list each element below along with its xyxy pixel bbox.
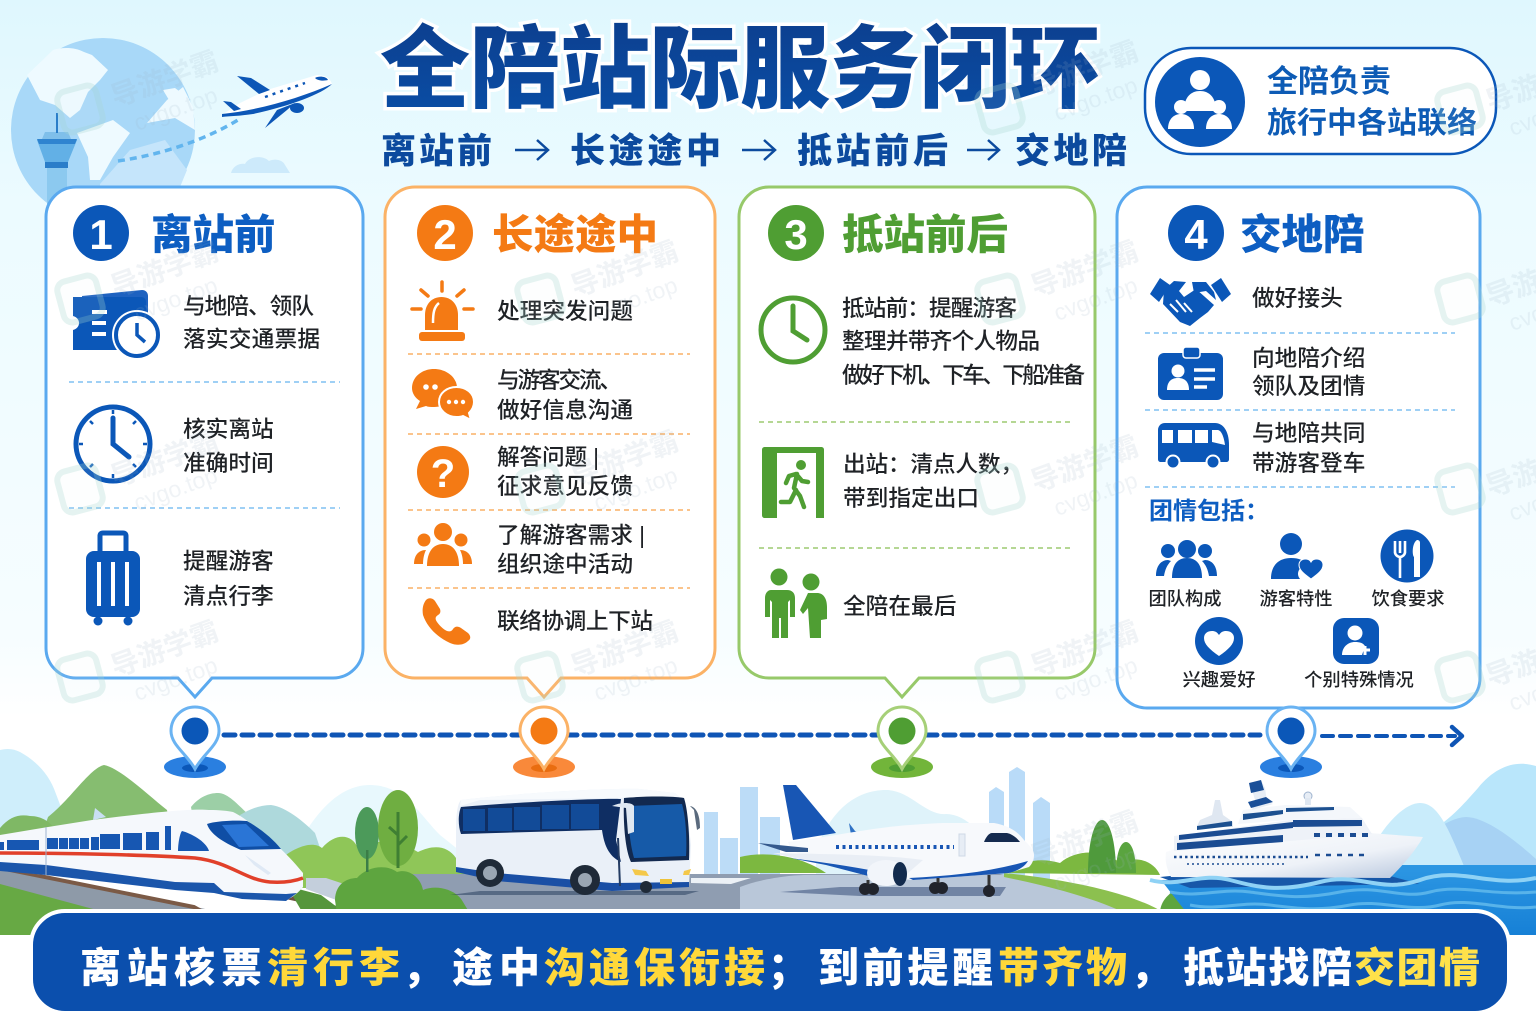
icon: leader and tourist <box>765 568 827 638</box>
icon: team <box>1156 540 1217 578</box>
text: remind <box>842 295 1085 388</box>
icon: question mark <box>417 446 469 498</box>
watermark pattern: 导游学霸 <box>567 615 683 683</box>
banner text: ， <box>402 945 443 991</box>
watermark pattern: cvgo.top <box>1050 467 1141 521</box>
number badge 4: 4 <box>1184 211 1208 258</box>
watermark pattern: cvgo.top <box>590 652 681 706</box>
text: needs: 组织途中活动 <box>497 551 633 577</box>
icon: handshake <box>1150 278 1231 326</box>
watermark pattern: 导游学霸 <box>1027 430 1143 498</box>
watermark pattern: cvgo.top <box>130 462 221 516</box>
map pin 4 <box>1260 707 1322 778</box>
icon: passenger airplane <box>758 785 1034 897</box>
icon: cruise ship <box>1160 780 1423 888</box>
watermark pattern: 导游学霸 <box>1027 235 1143 303</box>
icon: id badge <box>1158 347 1223 400</box>
text: emergencies: 处理突发问题 <box>497 298 633 324</box>
text: exit: 出站：清点人数， <box>843 451 1023 477</box>
dotted flight path <box>118 120 238 161</box>
icon: alarm <box>412 282 473 341</box>
icon: green clock <box>761 298 825 362</box>
text: needs: 了解游客需求 | <box>497 522 645 548</box>
text: communicate: 做好信息沟通 <box>497 397 633 423</box>
icon: heart circle <box>1195 617 1243 665</box>
text: remind: 做好下机、下车、下船准备 <box>842 362 1085 388</box>
banner text: 途中 <box>452 945 540 991</box>
banner text: 离站核票 <box>80 945 262 991</box>
banner text: 交团情 <box>1354 945 1480 991</box>
banner text: 抵站找陪 <box>1183 945 1352 991</box>
panel 1: before departure <box>46 187 363 697</box>
small cloud <box>231 157 290 173</box>
label: special cases: 个别特殊情况 <box>1304 669 1414 690</box>
globe and control tower illustration <box>11 38 195 222</box>
icon: person plus <box>1333 618 1379 664</box>
heading 4: 交地陪 <box>1240 211 1365 258</box>
watermark pattern: cvgo.top <box>130 82 221 136</box>
text: answer questions: 解答问题 | <box>497 444 599 470</box>
text: exit: 带到指定出口 <box>843 485 979 511</box>
watermark pattern: 导游学霸 <box>107 45 223 113</box>
watermark pattern: 导游学霸 <box>567 425 683 493</box>
watermark pattern: 导游学霸 <box>1027 35 1143 103</box>
icon: group of people <box>414 523 472 566</box>
banner text: ； <box>768 945 809 991</box>
watermark pattern: cvgo.top <box>1050 272 1141 326</box>
heading 1: 离站前 <box>151 211 276 258</box>
icon: high speed train <box>0 808 303 901</box>
heading 2: 长途途中 <box>492 211 658 258</box>
subtitle flow: 交地陪 <box>1015 131 1127 171</box>
icon: chat bubbles <box>412 369 474 420</box>
watermark pattern: cvgo.top <box>130 652 221 706</box>
badge text: 旅行中各站联络 <box>1267 107 1477 140</box>
watermark pattern: cvgo.top <box>1050 72 1141 126</box>
watermark pattern: cvgo.top <box>1050 842 1141 896</box>
banner text: 到前提醒 <box>818 945 993 991</box>
text: last: 全陪在最后 <box>843 593 956 619</box>
icon: person with heart <box>1271 533 1323 579</box>
heading: group info: 团情包括： <box>1149 498 1269 525</box>
text: luggage: 提醒游客 <box>183 548 274 574</box>
label: dietary: 饮食要求 <box>1371 588 1445 609</box>
icon: phone <box>423 598 470 645</box>
watermark pattern: cvgo.top <box>590 462 681 516</box>
icon: cutlery <box>1380 530 1434 582</box>
watermark pattern: cvgo.top <box>1050 652 1141 706</box>
text: communicate: 与游客交流、 <box>497 367 622 393</box>
text: coordinate: 联络协调上下站 <box>497 608 653 634</box>
icon: question mark: ? <box>431 452 455 496</box>
subtitle flow: 抵站前后 <box>797 132 948 171</box>
sea <box>1161 865 1536 935</box>
watermark pattern: 导游学霸 <box>567 235 683 303</box>
text: tickets: 落实交通票据 <box>183 326 320 352</box>
number badge 2 <box>417 205 473 261</box>
map pin 2 <box>513 707 575 778</box>
watermark pattern: 导游学霸 <box>107 235 223 303</box>
scene: ground, road and apron <box>0 837 1209 935</box>
watermark pattern: 导游学霸 <box>107 615 223 683</box>
icon: airplane <box>222 75 332 128</box>
number badge 3: 3 <box>784 211 808 258</box>
icon: exit door <box>762 447 824 518</box>
watermark pattern: 导游学霸 <box>1027 615 1143 683</box>
icon: trees <box>355 790 1212 935</box>
text: luggage: 清点行李 <box>183 583 274 609</box>
number badge 4 <box>1168 205 1224 261</box>
title: 全陪站际服务闭环 <box>380 20 1100 120</box>
watermark pattern: cvgo.top <box>590 272 681 326</box>
heading 3: 抵站前后 <box>842 211 1008 258</box>
sea foreground waves <box>1150 875 1536 897</box>
text: answer questions: 征求意见反馈 <box>497 473 633 499</box>
text: verify time: 核实离站 <box>183 416 274 442</box>
icon: suitcase <box>86 533 140 626</box>
watermark pattern: 导游学霸 <box>107 425 223 493</box>
icon: bus <box>1158 423 1229 468</box>
icon: people around a table <box>1155 57 1245 147</box>
banner text: ， <box>1130 945 1171 991</box>
icon: clock <box>76 407 150 481</box>
number badge 1 <box>73 205 129 261</box>
panel 3: around arrival <box>739 187 1095 697</box>
panel 4: handover to local guide <box>1117 187 1480 708</box>
number badge 2: 2 <box>433 211 457 258</box>
label: team composition: 团队构成 <box>1148 588 1222 609</box>
watermark pattern: 导游学霸 <box>1027 805 1143 873</box>
icon: tickets and clock <box>73 290 162 360</box>
subtitle flow: 离站前 <box>381 132 492 171</box>
text: remind: 整理并带齐个人物品 <box>842 328 1040 354</box>
text: introduce: 领队及团情 <box>1252 373 1365 399</box>
subtitle flow <box>381 131 1127 171</box>
badge: escort responsibility <box>1145 48 1496 154</box>
map pin 1 <box>164 707 226 778</box>
number badge 1: 1 <box>89 211 113 258</box>
banner text: 清行李 <box>267 945 400 991</box>
label: tourist traits: 游客特性 <box>1259 588 1333 609</box>
label: interests: 兴趣爱好 <box>1182 669 1256 690</box>
badge text: 全陪负责 <box>1267 64 1391 99</box>
icon: coach bus <box>450 789 700 895</box>
dashed timeline with arrow <box>224 727 1462 745</box>
text: connect: 做好接头 <box>1252 285 1343 311</box>
watermark pattern: cvgo.top <box>130 272 221 326</box>
summary banner <box>31 911 1509 1013</box>
text: tickets: 与地陪、领队 <box>183 293 314 319</box>
number badge 3 <box>768 205 824 261</box>
map pin 3 <box>871 707 933 778</box>
scene: distant hills and city <box>0 749 1536 882</box>
text: verify time: 准确时间 <box>183 450 274 476</box>
panel 2: on the road <box>385 187 715 697</box>
text: boarding: 与地陪共同 <box>1252 420 1365 446</box>
text: remind: 抵站前：提醒游客 <box>842 295 1017 321</box>
text: introduce: 向地陪介绍 <box>1252 345 1365 371</box>
banner text: 带齐物 <box>998 945 1127 991</box>
text: boarding: 带游客登车 <box>1252 450 1365 476</box>
banner text: 沟通保衔接 <box>544 945 765 991</box>
subtitle flow: 长途途中 <box>570 131 721 171</box>
